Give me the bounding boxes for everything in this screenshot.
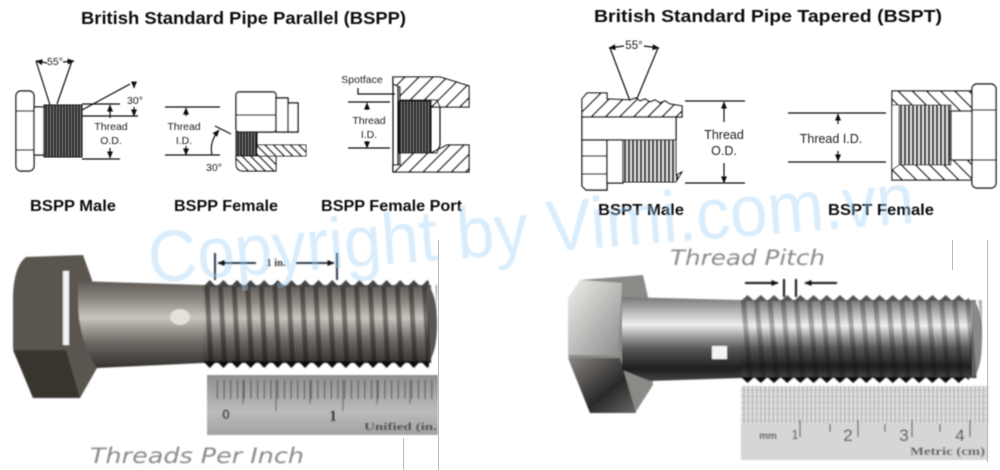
ruler: inches: Unified (in. [364,421,437,433]
diagram: BSPP female port: I.D. [361,129,377,141]
bolt shank [78,281,203,368]
dimension: pitch arrows [745,279,837,297]
diagram: BSPT male: Thread [704,128,744,142]
ruler: metric: 2 [843,426,853,445]
diagram: BSPT female: Thread I.D. [800,132,862,146]
ruler: metric: 1 [791,427,799,442]
heading: BSPT: British Standard Pipe Tapered (BSPT) [594,6,942,26]
ruler: metric: Metric (cm) [910,444,985,458]
heading: BSPP: British Standard Pipe Parallel (BSPP) [81,8,406,28]
ruler: metric [741,386,988,460]
ruler: inches: 1 [329,408,337,425]
bolt thread [741,295,982,383]
label: BSPT female: BSPT Female [828,202,934,219]
panel: BSPP diagrams [16,8,469,215]
ruler: metric: mm [759,431,777,442]
diagram: BSPT male: 55° [625,40,643,52]
label: BSPT male: BSPT Male [598,202,684,219]
diagram: BSPP male: O.D. [100,135,122,147]
photo: bolt, threads per inch [13,253,438,468]
photo: bolt, thread pitch [568,246,988,460]
caption: thread pitch: Thread Pitch [670,246,825,270]
bolt thread [203,280,437,368]
diagram: BSPP female: 30° [206,162,222,174]
shank highlight [712,346,727,359]
diagram: BSPP male [16,56,143,171]
ruler: inches: 0 [222,406,230,422]
bolt head [13,255,97,398]
shank highlight [170,309,190,325]
diagram: BSPP female: I.D. [176,135,192,147]
dimension: 1 in.: 1 in. [266,258,286,269]
diagram: BSPT male: O.D. [711,144,737,158]
dimension: 1 in. [215,253,337,280]
diagram: BSPP male: 30° [127,95,143,107]
panel: BSPT diagrams [582,6,996,219]
diagram: BSPT male [582,40,745,190]
bolt head [568,275,653,413]
diagram: BSPP female: Thread [167,121,201,133]
label: BSPP female: BSPP Female [174,198,278,215]
ruler: metric: 4 [955,426,965,445]
diagram: BSPP male: Thread [94,121,128,133]
label: BSPP female port: BSPP Female Port [321,198,462,215]
label: BSPP male: BSPP Male [30,198,116,215]
diagram: BSPP female [165,92,306,174]
ruler: metric: 3 [899,426,909,445]
diagram: BSPT female [788,84,996,188]
diagram: BSPP male: 55° [47,56,63,68]
diagram: BSPP female port: Spotface [341,74,383,86]
diagram: BSPP female port: Thread [352,115,386,127]
ruler: inches [207,375,438,435]
diagram: BSPP female port [341,74,469,172]
bolt shank [622,297,741,381]
caption: threads per inch: Threads Per Inch [90,444,304,468]
watermark: Copyright by Vimi.com.vn [145,159,917,299]
